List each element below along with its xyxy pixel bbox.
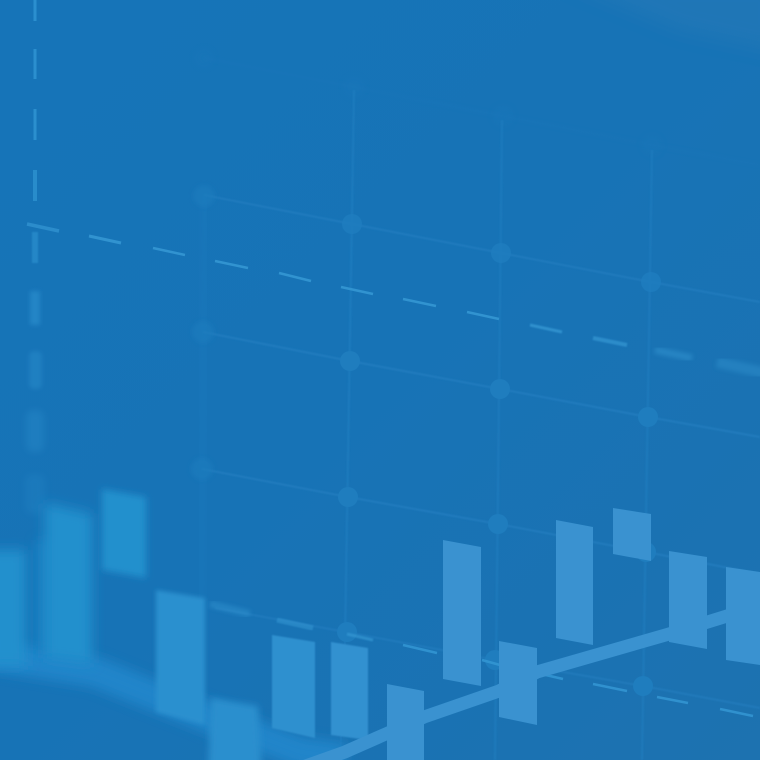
- trend line (sharp right part): [300, 603, 760, 760]
- vertical dashed axis: [25, 0, 45, 514]
- blurred candlesticks, left side: [0, 489, 368, 760]
- sharp candlesticks, right side: [387, 508, 760, 760]
- chart grid: node dots: [191, 49, 662, 696]
- sloped dashed line: [27, 224, 760, 373]
- chart grid: vertical lines: [201, 90, 652, 760]
- trend line (blurred left part): [0, 655, 345, 758]
- chart grid: sloped horizontal lines: [202, 58, 760, 708]
- lower sloped dashed line: [210, 604, 753, 716]
